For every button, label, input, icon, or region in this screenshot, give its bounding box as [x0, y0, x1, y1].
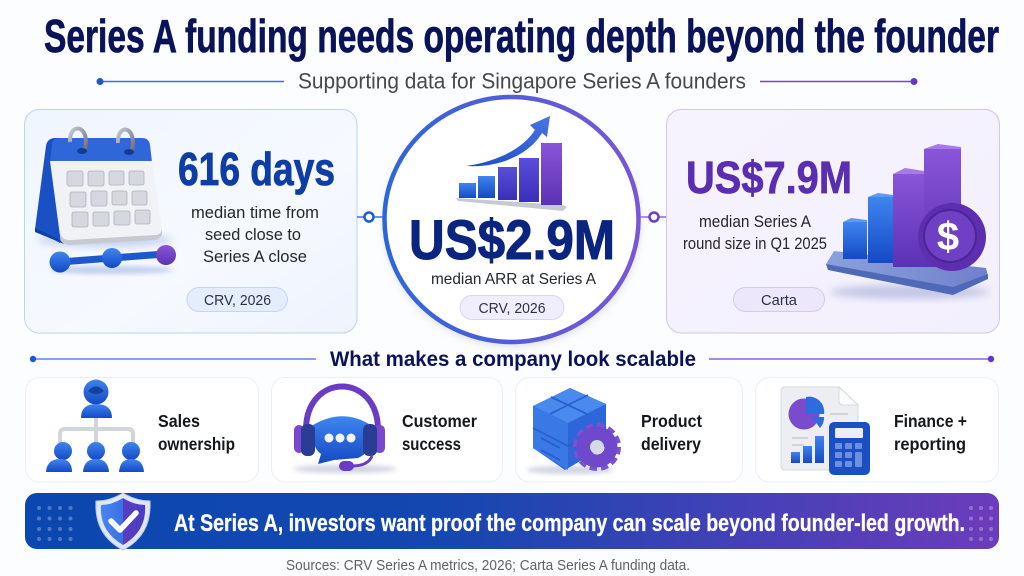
stat: US$7.9M: US$7.9M — [686, 152, 852, 203]
label: Sales — [158, 411, 200, 431]
subtitle with rules: Supporting data for Singapore Series A founders — [298, 68, 746, 94]
label: reporting — [894, 434, 966, 454]
source pill: CRV — [187, 288, 288, 312]
source pill: Carta: Carta — [761, 293, 798, 309]
subtitle with rules — [96, 68, 918, 94]
label — [158, 411, 235, 454]
panel: product delivery — [516, 378, 742, 482]
panel: finance + reporting — [756, 378, 998, 482]
panel: US$7.9M — [666, 110, 1000, 333]
icon: shield with check — [96, 493, 150, 550]
icon: bars with coin: $ — [937, 215, 959, 259]
label: Product — [641, 411, 702, 431]
icon: growth chart — [456, 116, 567, 211]
text: description: median Series A — [699, 213, 811, 231]
icon: headset with chat — [293, 386, 397, 473]
text: description — [683, 213, 827, 253]
icon: org chart — [46, 380, 144, 472]
source pill: CRV — [460, 296, 564, 320]
label — [641, 411, 702, 454]
label: success — [402, 434, 461, 454]
icon: calendar — [35, 128, 173, 247]
stat: US$2.9M: US$2.9M — [409, 208, 615, 271]
connector left — [357, 212, 384, 222]
panel: 616 days — [24, 110, 357, 333]
label — [894, 411, 967, 454]
text: description — [191, 204, 319, 266]
source pill: CRV: CRV, 2026 — [204, 293, 271, 309]
label: Customer — [402, 411, 477, 431]
text: description: median time from — [191, 204, 319, 222]
label: ownership — [158, 434, 235, 454]
stat: 616 days: 616 days — [178, 143, 335, 195]
text: median ARR: median ARR at Series A — [431, 271, 596, 288]
icon: report and calculator — [781, 387, 870, 475]
source pill: Carta — [734, 288, 824, 312]
label: delivery — [641, 434, 701, 454]
icon: box with gear — [526, 388, 618, 474]
label — [402, 411, 477, 454]
text: description: seed close to — [205, 226, 301, 244]
sources: Sources: CRV Series A metrics, 2026; Carta Series A funding data. — [286, 558, 690, 574]
source pill: CRV: CRV, 2026 — [478, 301, 546, 317]
panel: centre circle US$2.9M — [384, 97, 640, 346]
panel: sales ownership — [26, 378, 258, 482]
icon: timeline — [50, 245, 176, 274]
panel: customer success — [272, 378, 502, 482]
text: description: round size in Q1 2025 — [683, 235, 827, 253]
label: Finance + — [894, 411, 967, 431]
section heading with rules — [30, 348, 994, 371]
connector right — [640, 212, 666, 222]
icon: bars with coin — [826, 144, 990, 299]
text: description: Series A close — [203, 248, 307, 266]
banner — [25, 493, 999, 550]
section heading with rules: What makes a company look scalable — [330, 348, 696, 371]
